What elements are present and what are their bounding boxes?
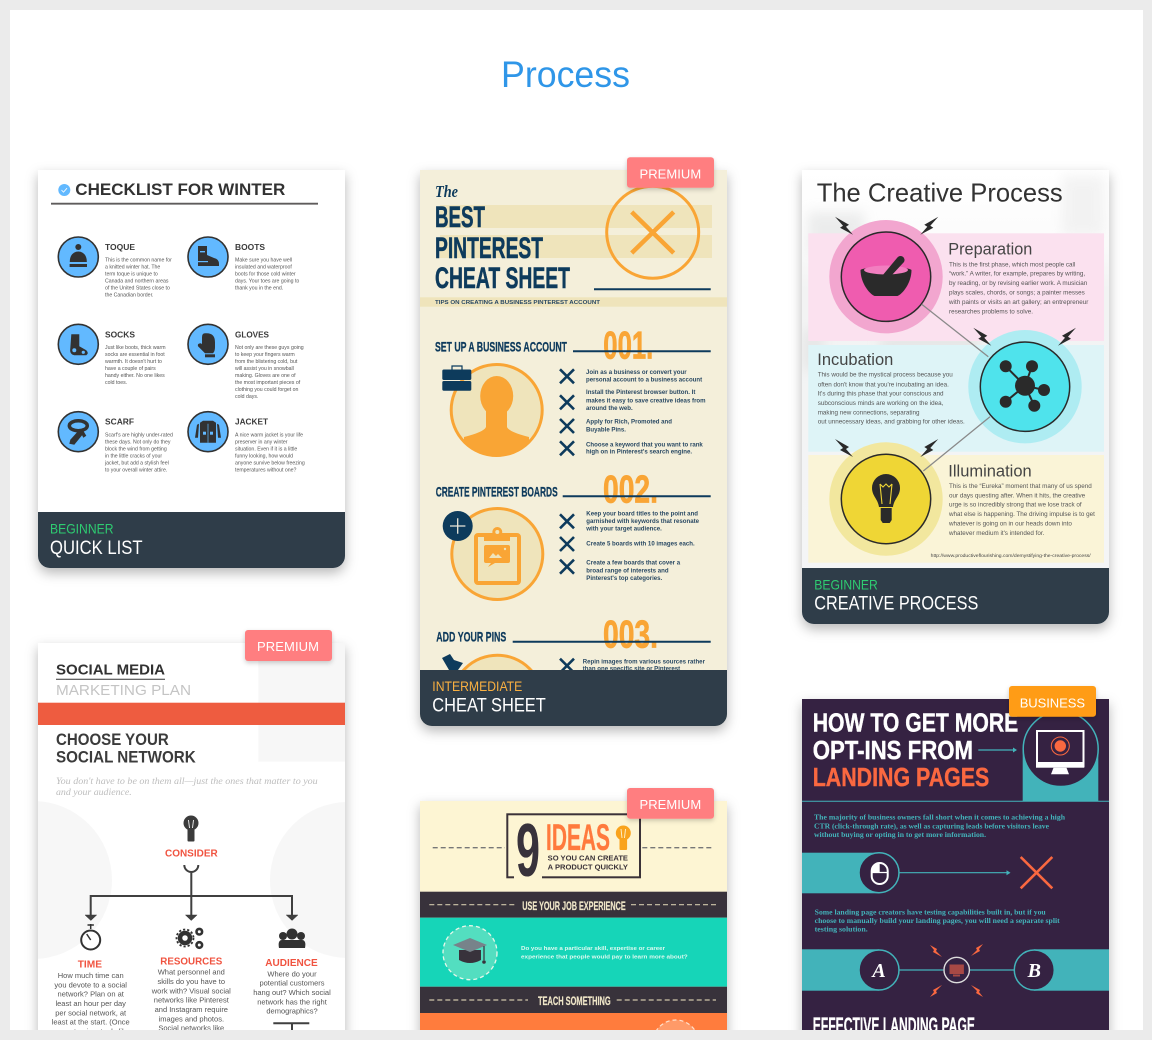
heading: how to get more opt-ins: OPT-INS FROM (813, 737, 973, 765)
item: gloves: GLOVES (235, 329, 269, 339)
text block: intro: CTR (click-through rate), as well as capturing leads before visitors leave (814, 822, 1049, 830)
item: jacket: A nice warm jacket is your life (235, 432, 303, 438)
item: jacket: funny looking, how would (235, 453, 293, 459)
card footer: cheat sheet: CHEAT SHEET (432, 696, 546, 717)
checklist 001: Apply for Rich, Promoted and (586, 418, 672, 425)
section header: teach something: TEACH SOMETHING (538, 994, 611, 1008)
section header: use your job experience: USE YOUR JOB EXPERIENCE (522, 899, 626, 913)
section 003 (436, 620, 711, 670)
item: gloves: will assist you in snowball (235, 366, 294, 372)
item: gloves: from the blistering cold, but (235, 359, 298, 365)
section 002 (436, 469, 711, 600)
item: socks: have a couple of pairs (105, 366, 156, 372)
heading: checklist for winter: CHECKLIST FOR WINTER (75, 180, 285, 199)
checklist 002 (560, 510, 700, 582)
intro text: and your audience. (56, 788, 132, 798)
item: boots: boots for those cold winter (235, 272, 296, 278)
step: incubation: often don't know that you're incubating an idea. (818, 382, 949, 389)
title frame: 9 ideas: 9 (516, 808, 540, 892)
column: time: you get going, tools like (52, 1027, 130, 1036)
card footer: cheat sheet: INTERMEDIATE (432, 678, 522, 694)
card: pinterest cheat sheet (420, 170, 727, 746)
column: resources: RESOURCES (160, 955, 222, 967)
section header: use your job experience (420, 892, 727, 918)
card image: 9 ideas (420, 808, 727, 1040)
icon: idea bulb (616, 826, 631, 850)
step: illumination: Illumination (948, 463, 1032, 481)
column: time: How much time can (58, 971, 124, 980)
icon: person circle (451, 364, 542, 459)
step: illumination: whatever medium it's intended for. (948, 530, 1045, 537)
checklist 001: around the web. (586, 405, 633, 412)
card: social media marketing plan (31, 641, 352, 1030)
heading: best pinterest cheat sheet: The (435, 182, 458, 201)
title frame: 9 ideas (433, 808, 714, 892)
item: boots: Make sure you have well (235, 258, 292, 264)
card footer: creative process: BEGINNER (814, 576, 878, 592)
badge: premium social media (245, 630, 332, 661)
item: scarf: in the little cracks of your (105, 453, 162, 459)
card image: creative process (802, 170, 1109, 568)
icon: mortar and pestle (829, 220, 943, 333)
section 003: ADD YOUR PINS (436, 629, 506, 645)
heading: how to get more opt-ins: HOW TO GET MORE (813, 710, 1018, 738)
icon: light bulb (829, 442, 943, 556)
text block: intro: The majority of business owners fall short when it comes to achieving a high (814, 813, 1065, 821)
step: illumination: our days questing after. When it hits, the creative (949, 492, 1086, 499)
checklist 002: broad range of interests and (586, 567, 669, 574)
item: boots (188, 237, 299, 292)
icon: consider bulb (184, 816, 198, 842)
text block: intro (814, 813, 1065, 839)
column: resources: What personnel and (158, 968, 225, 977)
icon: pin (442, 654, 463, 670)
text block: split testing: testing solution. (815, 926, 868, 934)
panel: teal: experience that people would pay to learn more about? (521, 954, 688, 960)
title frame: 9 ideas: SO YOU CAN CREATE (548, 853, 628, 862)
item: scarf: jacket, but add a stylish feel (104, 460, 169, 466)
column: resources: images and photos. (159, 1014, 224, 1023)
item: scarf: Scarf's are highly under-rated (105, 432, 173, 438)
checklist 001: makes it easy to save creative ideas from (586, 397, 706, 404)
section header: teach something (420, 987, 727, 1013)
checklist 001: Join as a business or convert your (586, 369, 687, 376)
label: consider: CONSIDER (165, 848, 218, 860)
item: toque: term toque is unique to (105, 272, 158, 278)
checklist 001 (560, 369, 706, 456)
subtitle band: TIPS ON CREATING A BUSINESS PINTEREST ACCOUNT (435, 300, 601, 306)
column: time: TIME (78, 959, 102, 971)
heading: choose your social network: SOCIAL NETWORK (56, 749, 196, 767)
item: socks: socks are essential in foot (105, 352, 165, 358)
heading: best pinterest cheat sheet (435, 182, 570, 295)
intro text: You don't have to be on them all—just the ones that matter to you (56, 777, 318, 787)
title frame: 9 ideas: A PRODUCT QUICKLY (548, 862, 628, 871)
section 003: Repin images from various sources rather (583, 658, 706, 665)
step: illumination (829, 439, 1095, 558)
intro text (56, 777, 318, 798)
icon: check badge (58, 184, 70, 196)
badge: premium social media: PREMIUM (257, 639, 319, 654)
step: preparation: Preparation (948, 240, 1032, 258)
section 001: 001. (603, 324, 653, 367)
column: audience: AUDIENCE (265, 957, 318, 969)
step: illumination: whatever is going on in our heads down into (948, 521, 1072, 528)
item: jacket: preserver in any winter (235, 439, 288, 445)
column: resources: skills do you have to (158, 977, 225, 986)
column: time: network? Plan on at (58, 990, 125, 999)
column: resources: networks like Pinterest (154, 996, 230, 1005)
column: audience: demographics? (266, 1007, 318, 1016)
card footer: quick list (38, 512, 345, 568)
card: 9 ideas (420, 801, 727, 1040)
icon: people (279, 928, 305, 948)
panel: teal: Do you have a particular skill, expertise or career (521, 946, 666, 952)
checklist 002: Keep your board titles to the point and (586, 510, 698, 517)
card image: pinterest cheat sheet (420, 185, 727, 670)
item: toque: This is the common name for (105, 258, 172, 264)
card footer: quick list: BEGINNER (50, 520, 114, 536)
title frame: 9 ideas: IDEAS (546, 817, 610, 858)
badge: premium cheat sheet (627, 157, 714, 188)
badge: business (1009, 686, 1096, 717)
page edge (0, 1030, 1152, 1040)
flow arrows (85, 865, 298, 920)
column: time: least an hour per day (55, 999, 126, 1008)
step: preparation: “work.” A writer, for example, prepares by writing, (949, 271, 1085, 278)
icon: stopwatch (81, 924, 100, 950)
card image: landing pages (802, 710, 1109, 1038)
step: illumination: This is the “Eureka” moment that many of us spend (949, 483, 1092, 490)
text block: intro: without buying or opting in to get more information. (814, 831, 986, 839)
checklist 001: personal account to a business account (586, 377, 702, 384)
card image: checklist for winter (51, 180, 318, 473)
item: scarf (58, 412, 173, 473)
badge: premium 9 ideas (627, 788, 714, 819)
checklist 001: high on in Pinterest's search engine. (586, 448, 692, 456)
item: boots: BOOTS (235, 242, 265, 252)
checklist 001: Buyable Pins. (586, 427, 626, 434)
item: socks: cold toes. (105, 380, 127, 386)
badge: premium cheat sheet: PREMIUM (640, 166, 701, 182)
item: toque: Canada and northern areas (105, 279, 169, 285)
graphic: click arrow to x (802, 853, 1052, 893)
step: illumination: urge is so incredibly strong that we lose track of (949, 502, 1082, 509)
step: incubation: subconscious minds are working on the idea, (818, 400, 944, 407)
checklist 002: with your target audience. (585, 526, 662, 533)
column: audience: network has the right (257, 997, 328, 1006)
item: socks: handy either. No one likes (105, 373, 165, 379)
item: jacket: situation. Even if it is a little (235, 446, 297, 452)
item: gloves: clothing you could forget on (235, 387, 299, 393)
column: audience (253, 928, 331, 1032)
connector lines (922, 304, 990, 471)
column: audience: potential customers (259, 979, 325, 988)
icon: large orange x circle (607, 186, 699, 278)
checklist 002: Pinterest's top categories. (586, 575, 663, 582)
heading: the creative process: The Creative Process (817, 178, 1063, 208)
heading: best pinterest cheat sheet: PINTEREST (435, 232, 543, 265)
panel: orange (420, 1013, 727, 1040)
panel: teal (420, 918, 727, 987)
item: toque: TOQUE (105, 242, 135, 252)
heading: social media marketing plan: SOCIAL MEDIA (56, 661, 165, 678)
heading: choose your social network: CHOOSE YOUR (56, 731, 169, 749)
card footer: cheat sheet (420, 670, 727, 726)
card footer: quick list: QUICK LIST (50, 538, 143, 559)
item: jacket: temperatures without one? (235, 467, 297, 473)
heading: how to get more opt-ins: LANDING PAGES (813, 764, 989, 792)
badge: premium 9 ideas: PREMIUM (640, 797, 701, 812)
heading: social media marketing plan: MARKETING PLAN (56, 682, 191, 699)
icon: gears (176, 929, 202, 948)
column: time: least at the start. (Once (52, 1018, 130, 1027)
item: scarf: to your overall winter attire. (105, 467, 167, 473)
column: audience: hang out? Which social (253, 988, 331, 997)
item: scarf: these days. Not only do they (105, 439, 171, 445)
step: incubation: out unnecessary ideas, and grabbing for other ideas. (818, 418, 965, 425)
text block: split testing (815, 908, 1060, 934)
icon: graduation cap (443, 926, 497, 980)
item: gloves: the most important pieces of (235, 380, 301, 386)
text block: split testing: choose to manually build your landing pages, you will need a separate split (815, 917, 1060, 925)
text block: split testing: Some landing page creators have testing capabilities built in, but if you (815, 908, 1046, 916)
checklist 002: Create a few boards that cover a (586, 560, 681, 567)
icon: network (968, 330, 1082, 443)
heading: choose your social network (56, 734, 196, 762)
icon: plus button (443, 511, 473, 541)
item: scarf: SCARF (105, 417, 134, 427)
graphic: a/b test: A (870, 960, 886, 982)
icon: monitor tab (1023, 712, 1098, 801)
item: toque: of the United States close to (105, 286, 170, 292)
heading: effective landing page: EFFECTIVE LANDING PAGE (813, 1013, 975, 1038)
item: gloves: cold days. (235, 394, 258, 400)
step: incubation: making new connections, separating (818, 409, 920, 416)
title: Process (501, 54, 630, 95)
step: preparation: researches problems to solve. (949, 308, 1033, 316)
badge: business: BUSINESS (1020, 695, 1085, 710)
item: boots: insulated and waterproof (235, 265, 292, 271)
step: illumination: what else is happening. The driving impulse is to get (948, 511, 1095, 518)
checklist 001: Choose a keyword that you want to rank (586, 441, 703, 448)
heading: social media marketing plan (56, 664, 190, 695)
card image: social media marketing plan (38, 664, 345, 1030)
item: socks (58, 324, 166, 386)
graphic: a/b test: B (1027, 960, 1041, 982)
item: socks: SOCKS (105, 329, 135, 339)
step: incubation (817, 328, 1082, 443)
card footer: creative process: CREATIVE PROCESS (814, 593, 978, 614)
subtitle band (420, 297, 727, 307)
item: socks: warmth. It doesn't hurt to (105, 359, 162, 365)
column: resources (151, 929, 231, 1033)
step: preparation: with paints or visits an art gallery; an entrepreneur (948, 299, 1088, 306)
column: audience: Where do your (267, 969, 317, 978)
step: incubation: This would be the mystical process because you (818, 372, 953, 379)
item: gloves: to keep your fingers warm (235, 352, 295, 358)
card: landing pages (802, 699, 1109, 1040)
section 003: 003. (603, 614, 658, 657)
icon: briefcase (442, 366, 471, 391)
section 001 (435, 324, 711, 459)
section 003: than one specific site or Pinterest (583, 665, 680, 672)
card footer: creative process (802, 568, 1109, 624)
item: toque: the Canadian border. (105, 293, 153, 299)
checklist 002: Create 5 boards with 10 images each. (586, 541, 695, 548)
step: preparation: plays scales, chords, or songs; a painter messes (949, 290, 1085, 297)
step: incubation: It's during this phase that your conscious and (818, 391, 944, 398)
item: jacket (188, 412, 305, 473)
checklist 002: garnished with keywords that resonate (586, 518, 700, 525)
item: boots: thank you in the end. (235, 286, 283, 292)
item: gloves: making. Gloves are one of (235, 373, 296, 379)
item: scarf: block the wind from getting (105, 446, 167, 452)
icon: clipboard circle (452, 508, 543, 600)
step: incubation: Incubation (817, 351, 893, 369)
item: toque (58, 237, 172, 299)
item: gloves (188, 324, 304, 400)
item: jacket: anyone survive below freezing (235, 460, 305, 466)
card: checklist for winter (38, 170, 345, 568)
column: resources: and Instagram require (155, 1005, 228, 1014)
item: toque: a knitted winter hat. The (105, 265, 160, 271)
step: preparation (829, 217, 1088, 333)
section 002: CREATE PINTEREST BOARDS (436, 484, 558, 500)
item: socks: Just like boots, thick warm (105, 345, 166, 351)
heading: best pinterest cheat sheet: BEST (435, 201, 485, 234)
column: time: you devote to a social (54, 980, 127, 989)
checklist 001: Install the Pinterest browser button. It (586, 389, 695, 396)
section 001: SET UP A BUSINESS ACCOUNT (435, 339, 567, 355)
column: resources: work with? Visual social (151, 986, 231, 995)
graphic: a/b test (802, 944, 1109, 997)
section 002: 002. (603, 469, 658, 512)
step: illumination: http://www.productiveflourishing.com/demystifying-the-creative-process/ (931, 553, 1091, 558)
column: time (52, 924, 130, 1036)
heading: best pinterest cheat sheet: CHEAT SHEET (435, 262, 570, 295)
item: gloves: Not only are these guys going (235, 345, 304, 351)
column: time: per social network, at (55, 1008, 127, 1017)
item: boots: days. Your toes are going to (235, 279, 299, 285)
card: creative process (802, 170, 1109, 624)
heading: how to get more opt-ins (813, 710, 1018, 792)
item: jacket: JACKET (235, 417, 269, 427)
column: resources: Social networks like (158, 1024, 224, 1033)
step: preparation: by reading, or by revising earlier work. A musician (949, 280, 1088, 287)
step: preparation: This is the first phase, which most people call (949, 261, 1075, 268)
